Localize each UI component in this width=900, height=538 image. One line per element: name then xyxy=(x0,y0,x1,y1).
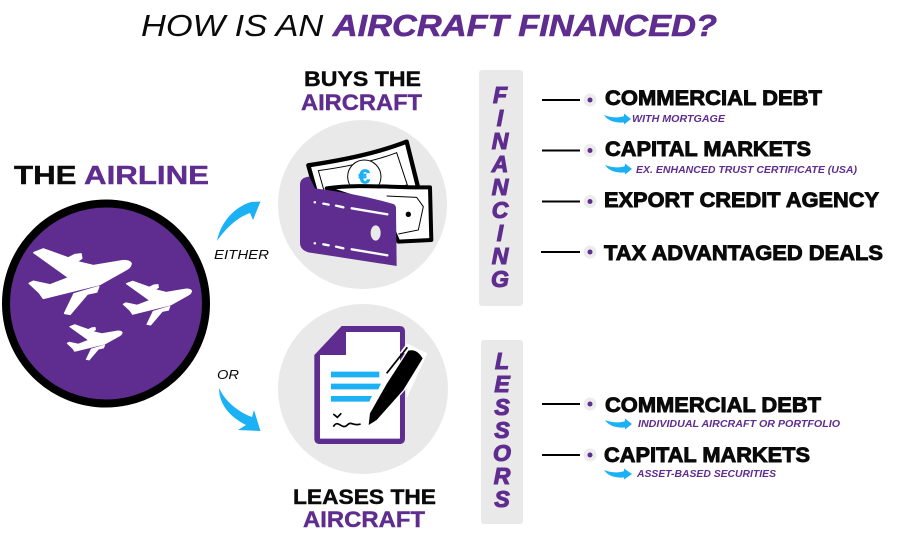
note: with mortgage: WITH MORTGAGE xyxy=(632,114,725,125)
item: export credit agency: EXPORT CREDIT AGENCY xyxy=(604,189,879,212)
icon: small plane xyxy=(67,325,122,360)
arrow: individual aircraft xyxy=(605,418,632,430)
arrow: asset-based securities xyxy=(604,468,632,480)
panel: financing: G xyxy=(491,266,509,292)
heading: leases the aircraft xyxy=(293,486,436,532)
panel: financing: N xyxy=(492,243,509,269)
note: asset-based securities: ASSET-BASED SECURITIES xyxy=(636,469,776,480)
connectors and bullets xyxy=(541,94,596,462)
signature xyxy=(333,413,361,427)
icon: medium plane xyxy=(123,281,191,325)
text lines xyxy=(331,372,381,402)
panel: financing: N xyxy=(492,174,509,200)
icon: lease document with pen xyxy=(278,304,448,474)
heading: buys the aircraft xyxy=(301,68,423,115)
arrow: enhanced trust certificate xyxy=(605,164,632,174)
heading: the airline: THE AIRLINE xyxy=(14,160,209,190)
pen xyxy=(385,343,427,398)
heading: buys the aircraft: AIRCRAFT xyxy=(301,90,423,115)
panel: financing: F xyxy=(493,82,508,108)
panel: lessors: O xyxy=(493,440,511,466)
icon: wallet with banknotes xyxy=(278,120,447,289)
panel: lessors: S xyxy=(494,486,510,512)
panel: financing: I xyxy=(497,105,504,131)
icon: wallet with banknotes: € xyxy=(359,165,371,188)
note: individual aircraft: INDIVIDUAL AIRCRAFT OR PORTFOLIO xyxy=(638,419,840,430)
arrow: or xyxy=(219,388,260,431)
back banknote xyxy=(308,142,418,207)
heading: leases the aircraft: LEASES THE xyxy=(293,486,436,509)
heading: leases the aircraft: AIRCRAFT xyxy=(303,507,426,532)
panel: lessors: R xyxy=(494,463,511,489)
panel: financing: N xyxy=(492,128,509,154)
panel: financing: I xyxy=(497,220,504,246)
item: commercial debt: COMMERCIAL DEBT xyxy=(605,87,822,110)
item: tax advantaged deals: TAX ADVANTAGED DEALS xyxy=(604,242,883,265)
icon: large plane xyxy=(29,249,131,314)
panel: lessors xyxy=(481,340,523,524)
label: or: OR xyxy=(217,367,239,382)
panel: financing: C xyxy=(492,197,509,223)
panel: lessors: S xyxy=(494,417,510,443)
panel: lessors: S xyxy=(494,394,510,420)
document sheet xyxy=(314,326,405,444)
item: capital markets: CAPITAL MARKETS xyxy=(605,138,811,161)
title: HOW IS AN AIRCRAFT FINANCED? xyxy=(141,8,717,43)
label: either: EITHER xyxy=(214,247,269,262)
icon: airline circle with planes xyxy=(6,204,206,404)
arrow: either xyxy=(217,202,260,241)
panel: lessors: E xyxy=(494,371,510,397)
note: enhanced trust certificate: EX. ENHANCED TRUST CERTIFICATE (USA) xyxy=(636,165,858,176)
item: lessor capital markets: CAPITAL MARKETS xyxy=(604,444,810,467)
panel: financing: A xyxy=(491,151,508,177)
wallet body xyxy=(300,177,397,266)
panel: financing xyxy=(479,70,523,306)
item: lessor commercial debt: COMMERCIAL DEBT xyxy=(605,394,821,417)
heading: buys the aircraft: BUYS THE xyxy=(304,68,421,91)
panel: lessors: L xyxy=(495,348,509,374)
arrow: with mortgage xyxy=(604,114,631,124)
front banknote xyxy=(327,186,431,242)
euro coin xyxy=(348,160,381,193)
